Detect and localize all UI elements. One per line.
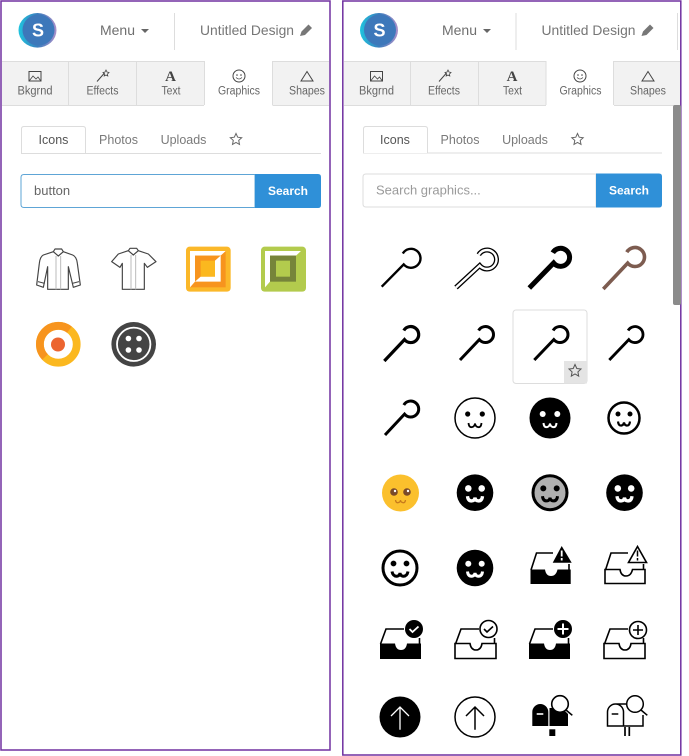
- icon: smile solid: [530, 398, 570, 438]
- search box: Search: [268, 184, 308, 198]
- tab: text: [162, 69, 181, 98]
- menu button: Menu: [442, 22, 477, 38]
- toolbar tabs: [344, 61, 680, 107]
- icon: favourites star: [572, 134, 583, 144]
- graphics sub tabs: Uploads: [161, 133, 206, 147]
- tab: graphics: Graphics: [218, 86, 260, 98]
- tab: graphics: Graphics: [560, 86, 602, 98]
- tab: effects: [86, 70, 119, 98]
- icon: hook row 2 col 4: [609, 327, 643, 360]
- icon: hook row 2 col 2: [460, 327, 494, 360]
- icon: orange square button: [186, 247, 231, 292]
- tab: text: [503, 69, 523, 98]
- search box: [363, 174, 662, 208]
- tab: shapes: Shapes: [289, 86, 325, 98]
- graphics sub tabs: Icons: [39, 133, 68, 147]
- icon: inbox check outline: [455, 620, 497, 658]
- icon: smile black small: [457, 550, 493, 586]
- graphics sub tabs: [21, 126, 321, 154]
- search box: Search graphics...: [376, 182, 481, 198]
- tab: effects: Effects: [86, 86, 119, 98]
- logo: S: [373, 20, 386, 40]
- toolbar tabs: [2, 61, 329, 107]
- icon: hook bold: [529, 248, 570, 288]
- menu button: Menu: [100, 22, 135, 38]
- search box: Search: [609, 184, 649, 198]
- tab: background: Bkgrnd: [359, 86, 394, 98]
- icon: smile black: [457, 474, 493, 511]
- icon: short sleeve shirt: [112, 248, 156, 289]
- design title: Untitled Design: [200, 22, 294, 38]
- graphics sub tabs: [363, 126, 662, 153]
- tab: effects: Effects: [428, 86, 460, 98]
- logo: [360, 13, 398, 48]
- icon: inbox warning solid: [530, 546, 572, 584]
- icon: smile yellow: [382, 474, 419, 512]
- icon: hook row 2 col 1: [384, 327, 419, 361]
- tab: graphics: [560, 70, 602, 98]
- tab: graphics: [218, 70, 260, 98]
- tab: background: [18, 72, 52, 98]
- icon: long sleeve shirt: [37, 249, 80, 289]
- icon results: [37, 247, 306, 367]
- icon grid: [380, 248, 647, 738]
- panel: browse graphics: [343, 1, 681, 755]
- icon: orange round button: [40, 326, 77, 363]
- icon: four hole button: [111, 322, 156, 367]
- icon: inbox warning outline: [605, 546, 646, 584]
- icon: upload outline: [455, 697, 495, 737]
- icon: inbox check solid: [380, 620, 423, 659]
- icon: favourites star: [230, 134, 242, 144]
- graphics sub tabs: Uploads: [502, 133, 548, 147]
- selected icon frame: [513, 310, 587, 384]
- icon: smile white bold: [383, 551, 417, 585]
- icon: hook outline: [456, 250, 496, 288]
- icon: mailbox search outline: [608, 696, 647, 736]
- tab: shapes: [289, 72, 325, 98]
- icon: hook brown: [603, 248, 644, 289]
- icon: hook row 3 col 1: [385, 401, 419, 435]
- scrollbar: [673, 105, 681, 305]
- search box: button: [34, 183, 70, 198]
- icon: smile black alt: [606, 474, 643, 511]
- tab: text: A: [165, 69, 176, 85]
- icon: upload solid: [380, 696, 420, 738]
- icon: smile grey: [533, 476, 567, 510]
- icon: smile outline: [455, 398, 495, 438]
- icon: hook thin: [382, 249, 420, 287]
- graphics sub tabs: Icons: [380, 133, 410, 147]
- icon: green square button: [261, 247, 306, 292]
- tab: shapes: [630, 72, 666, 98]
- icon: smile bold outline: [608, 402, 640, 434]
- tab: text: A: [507, 69, 518, 85]
- tab: shapes: Shapes: [630, 86, 666, 98]
- panel: search results for button: [1, 1, 330, 750]
- icon: inbox plus solid: [529, 620, 572, 659]
- graphics sub tabs: Photos: [99, 133, 138, 147]
- icon: inbox plus outline: [604, 622, 646, 658]
- graphics sub tabs: Photos: [441, 133, 479, 147]
- tab: text: Text: [503, 86, 523, 98]
- design title: Untitled Design: [542, 22, 636, 38]
- tab: effects: [428, 70, 460, 98]
- logo: [18, 13, 56, 48]
- tab: text: Text: [162, 86, 181, 98]
- tab: background: [359, 72, 394, 98]
- tab: background: Bkgrnd: [18, 86, 52, 98]
- icon: mailbox search solid: [532, 696, 572, 736]
- search box: [21, 174, 321, 208]
- icon: hook row 2 col 3: [534, 327, 568, 360]
- logo: S: [32, 20, 44, 40]
